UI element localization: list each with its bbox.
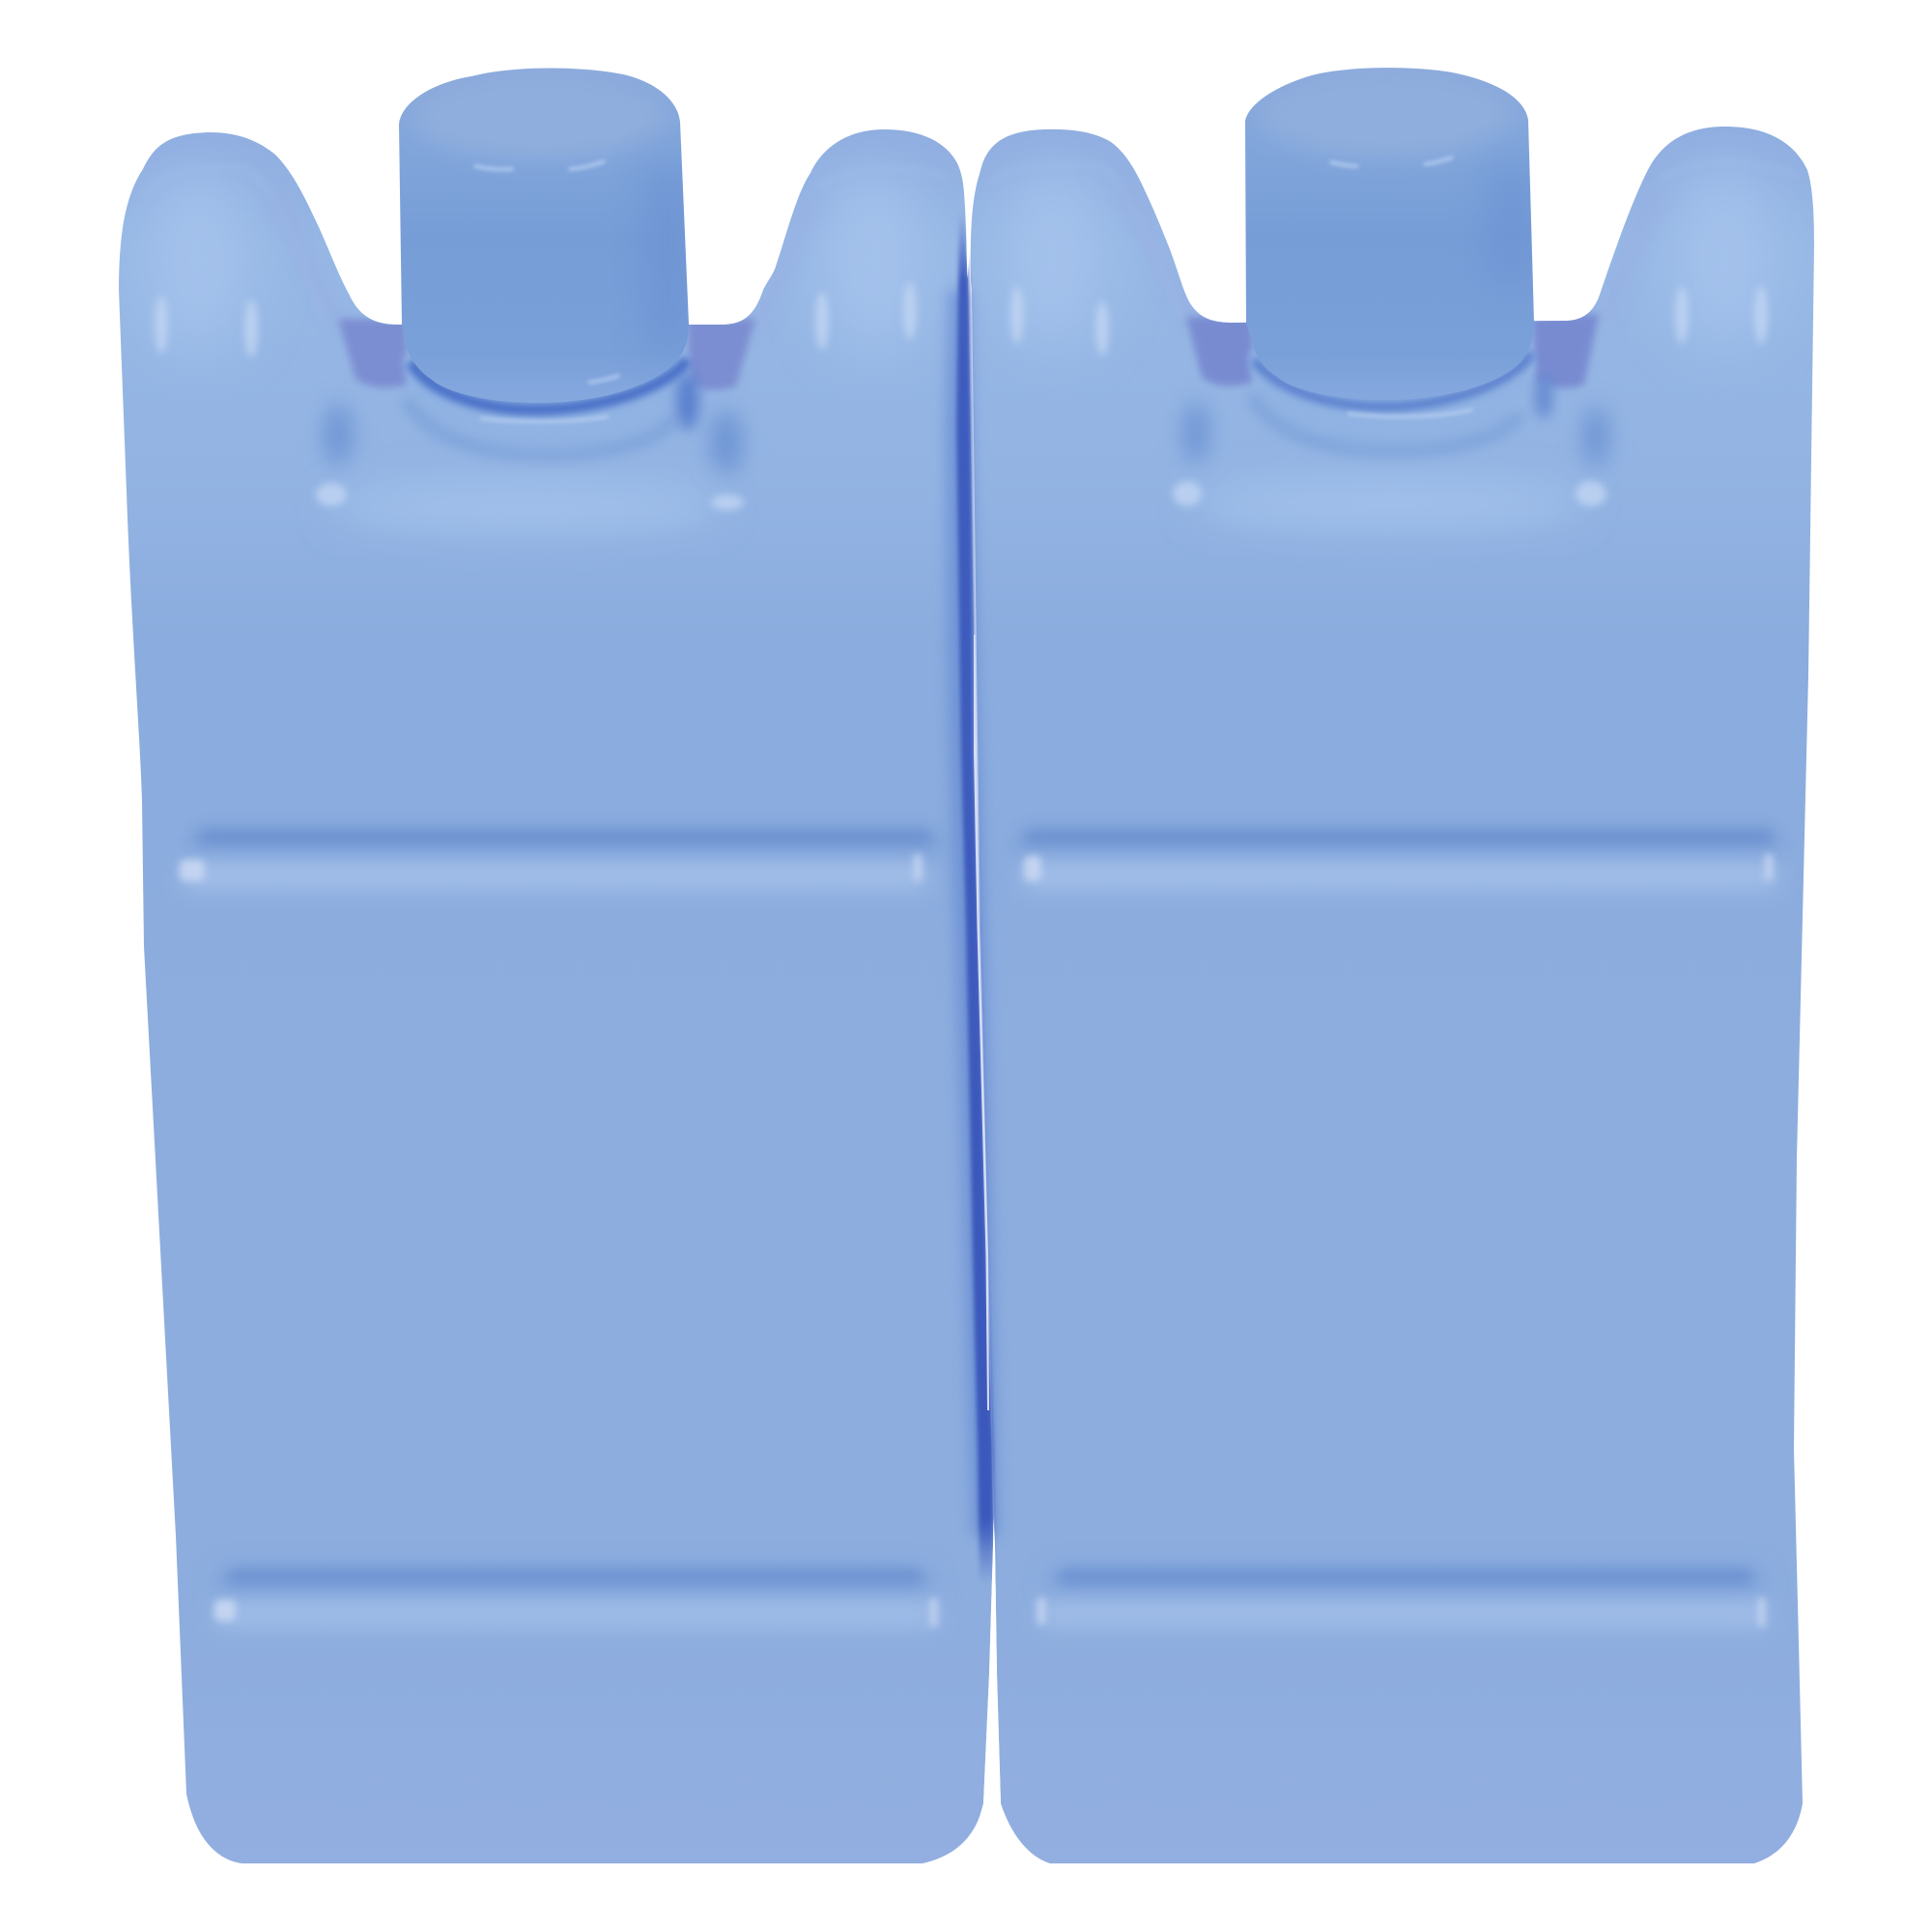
valley lilac shadows xyxy=(1186,314,1599,388)
left cap shading xyxy=(413,77,688,383)
collar highlight arc xyxy=(480,416,609,422)
left handle glow xyxy=(156,180,240,334)
lower ridge light xyxy=(1041,1601,1766,1626)
valley lilac shadows xyxy=(338,319,755,390)
right handle glow xyxy=(1684,174,1766,329)
right pack shading xyxy=(990,162,1799,1627)
soft highlights xyxy=(1010,286,1768,506)
neck side shadows xyxy=(325,404,352,466)
left cap shadow xyxy=(411,359,688,410)
upper ridge light xyxy=(184,863,927,888)
shoulder light band xyxy=(333,484,720,530)
upper ridge dark line xyxy=(198,830,932,845)
collar lower shadow xyxy=(406,398,676,456)
lower ridge highlights xyxy=(214,1598,937,1627)
lower ridge shade xyxy=(224,1586,920,1591)
right cap xyxy=(1245,68,1534,400)
inner handle slopes xyxy=(1116,174,1666,333)
upper ridge dark line xyxy=(1024,830,1773,845)
right pack body xyxy=(971,127,1814,1863)
upper ridge highlights xyxy=(180,854,922,881)
lower ridge highlights xyxy=(1037,1598,1765,1627)
lower ridge shade xyxy=(1048,1569,1763,1602)
right cap right side shade xyxy=(1492,164,1531,280)
seam between packs xyxy=(945,126,1005,1863)
left cap xyxy=(399,68,689,403)
right ice pack xyxy=(971,68,1814,1863)
left ice pack xyxy=(119,68,993,1863)
lower ridge light xyxy=(217,1601,937,1626)
upper ridge light xyxy=(1024,863,1777,888)
seam soft shadow xyxy=(945,290,999,1536)
left handle glow xyxy=(1012,174,1094,329)
lower ridge dark line xyxy=(227,1570,923,1585)
lower ridge dark line xyxy=(1058,1570,1753,1585)
right cap highlights xyxy=(1331,157,1452,166)
right handle glow xyxy=(833,180,916,334)
right cap shading xyxy=(1261,75,1531,280)
collar lower shadow xyxy=(1251,394,1521,452)
top white gap xyxy=(966,126,974,278)
collar xyxy=(402,355,410,379)
left pack body xyxy=(119,129,993,1863)
right cap shadow xyxy=(1254,353,1532,407)
inner handle slopes xyxy=(266,184,821,338)
right cap top face xyxy=(1261,75,1512,156)
upper ridge shade xyxy=(1014,829,1782,862)
upper ridge highlights xyxy=(1024,854,1773,881)
seam dark groove xyxy=(956,213,994,1584)
left cap top face xyxy=(424,97,653,158)
collar xyxy=(1249,353,1533,442)
handle inner rims xyxy=(145,168,945,319)
collar highlight arc xyxy=(1348,410,1473,416)
left cap highlights xyxy=(475,161,618,383)
soft highlights xyxy=(155,282,917,510)
shoulder light band xyxy=(1196,481,1582,527)
left pack shading xyxy=(145,168,945,1627)
upper ridge shade xyxy=(199,847,931,854)
seam light line xyxy=(974,635,989,1410)
handle inner rims xyxy=(990,162,1799,319)
neck side shadows xyxy=(1183,402,1208,464)
left cap right side shade xyxy=(653,160,689,328)
bottom white gap xyxy=(966,1517,1005,1863)
